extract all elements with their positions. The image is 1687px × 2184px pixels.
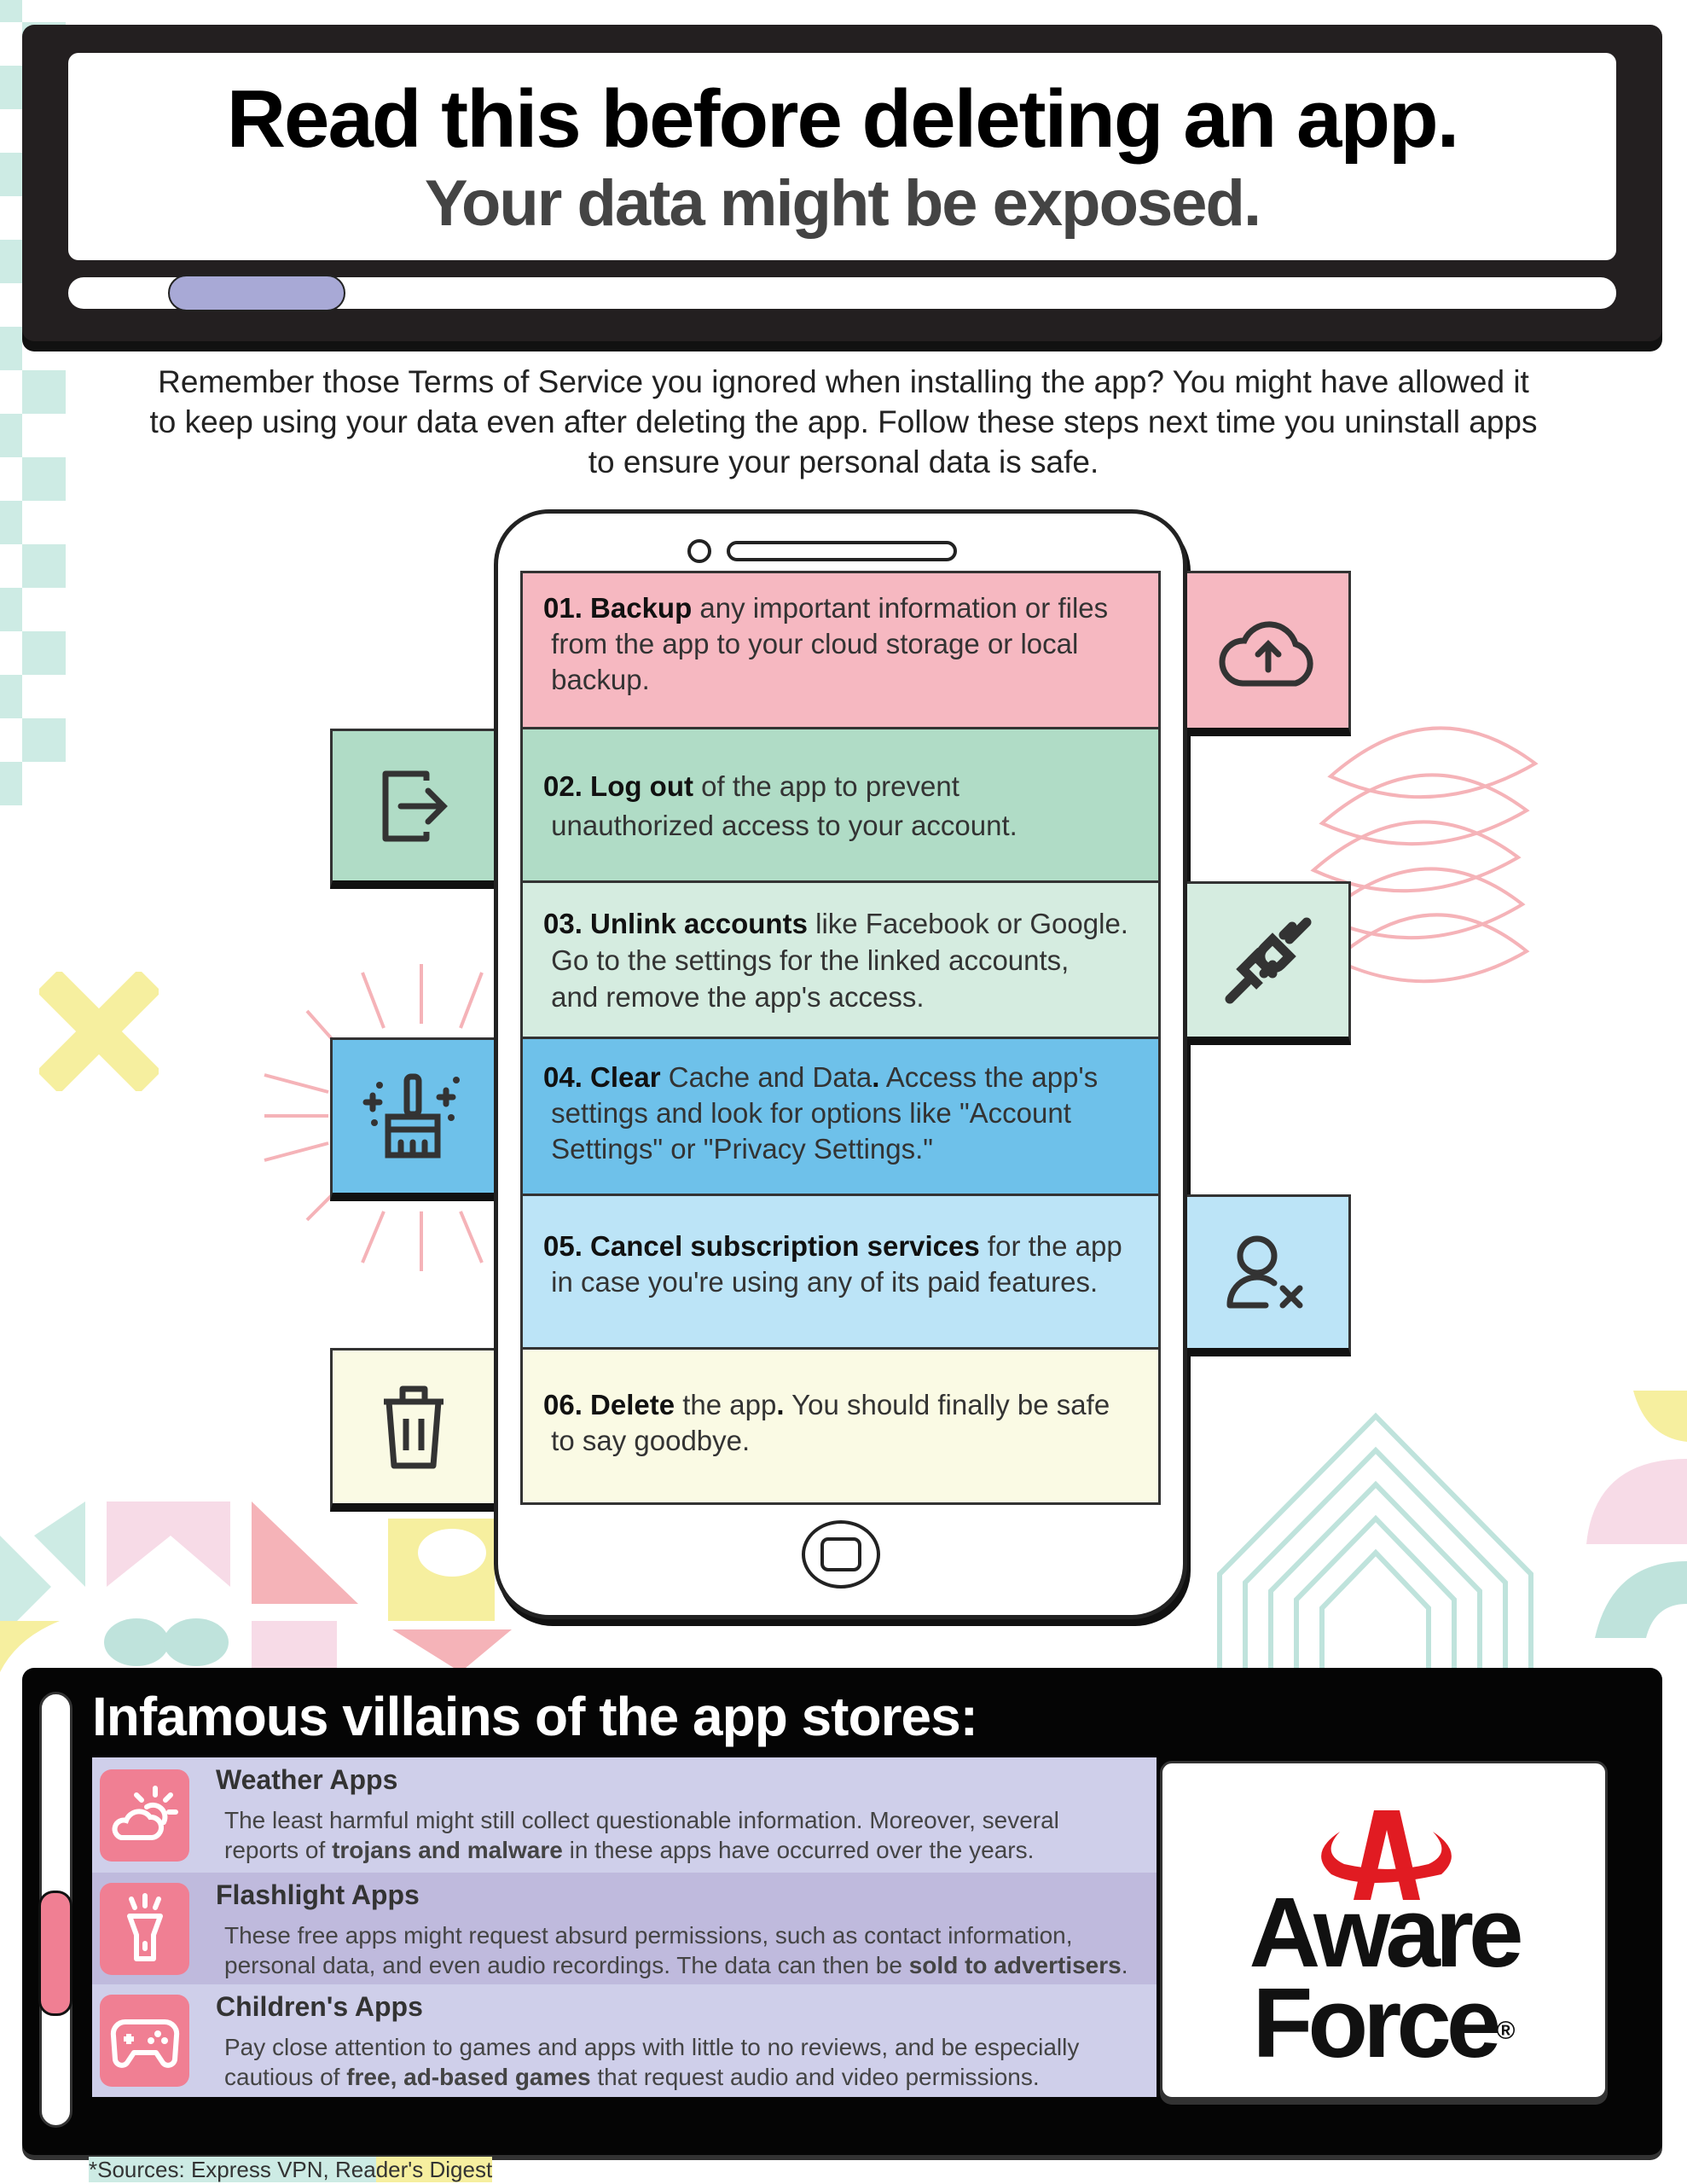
row: children's apps: Children's Apps [216, 1991, 423, 2022]
icon: flashlight [100, 1883, 189, 1975]
logo text: Force® [1252, 1967, 1515, 2078]
tab: trash icon [330, 1348, 494, 1512]
title box [68, 53, 1616, 260]
step 06 [520, 1347, 1161, 1505]
step 05: in case you're using any of its paid features. [551, 1266, 1098, 1298]
step 02: 02. Log out of the app to prevent [543, 770, 959, 802]
logo box [1160, 1761, 1608, 2100]
home button [802, 1520, 880, 1589]
speaker [687, 539, 711, 563]
decoration: yellow X [39, 972, 159, 1091]
villains panel [22, 1668, 1662, 2155]
step 06: to say goodbye. [551, 1425, 750, 1456]
decoration: bottom-left shapes [0, 1502, 512, 1672]
step 05 [520, 1194, 1161, 1350]
logo text [1249, 1877, 1521, 2078]
icon: logo emblem [1321, 1810, 1452, 1900]
icon: gamepad [100, 1995, 189, 2087]
row: weather apps: The least harmful might still collect questionable information. Moreover, several [224, 1807, 1059, 1833]
row: flashlight apps: Flashlight Apps [216, 1879, 420, 1910]
step 01: backup. [551, 664, 650, 695]
intro text: to ensure your personal data is safe. [588, 444, 1099, 479]
step 01 [520, 571, 1161, 729]
step 05: 05. Cancel subscription services for the app [543, 1230, 1122, 1262]
step 03: and remove the app's access. [551, 981, 925, 1013]
phone [494, 509, 1187, 1619]
tab: remove user icon [1187, 1194, 1351, 1356]
title: Read this before deleting an app. [227, 73, 1458, 165]
step 06: 06. Delete the app. You should finally be safe [543, 1389, 1110, 1420]
tab: unplug icon [1187, 881, 1351, 1045]
row: weather apps [92, 1757, 1157, 1873]
sources: *Sources: Express VPN, Reader's Digest [89, 2157, 492, 2182]
row: flashlight apps: These free apps might request absurd permissions, such as contact information, [224, 1922, 1073, 1949]
step 04: Settings" or "Privacy Settings." [551, 1133, 933, 1165]
tab: cloud upload icon [1187, 571, 1351, 736]
intro text: Remember those Terms of Service you ignored when installing the app? You might have allowed it [158, 364, 1529, 399]
step 01: from the app to your cloud storage or local [551, 628, 1078, 659]
step 03 [520, 880, 1161, 1039]
step 04: settings and look for options like "Account [551, 1097, 1071, 1129]
row: flashlight apps: personal data, and even audio recordings. The data can then be sold to advertisers. [224, 1952, 1128, 1978]
step 01: 01. Backup any important information or files [543, 592, 1108, 624]
row: weather apps: Weather Apps [216, 1764, 397, 1795]
step 04: 04. Clear Cache and Data. Access the app's [543, 1061, 1098, 1093]
decoration: teal nested houses [1217, 1413, 1533, 1668]
tab: logout icon [330, 729, 494, 889]
logo text: Aware [1249, 1877, 1519, 1988]
decoration: right edge shapes [1586, 1391, 1687, 1638]
step 04 [520, 1037, 1161, 1196]
scrollbar [68, 277, 1616, 309]
row: children's apps: cautious of free, ad-based games that request audio and video permissions. [224, 2064, 1040, 2090]
row: flashlight apps [92, 1873, 1157, 1984]
decoration: sunburst [264, 964, 484, 1271]
icon: weather [100, 1769, 189, 1862]
row: weather apps: reports of trojans and malware in these apps have occurred over the years. [224, 1837, 1034, 1863]
tab: broom icon [330, 1037, 494, 1201]
step 03: 03. Unlink accounts like Facebook or Google. [543, 908, 1128, 939]
decoration: checkerboard [0, 0, 66, 805]
row: children's apps: Pay close attention to games and apps with little to no reviews, and be especially [224, 2034, 1079, 2060]
subtitle: Your data might be exposed. [425, 167, 1260, 240]
header panel [22, 25, 1662, 341]
scrollbar left [39, 1692, 72, 2128]
step 03: Go to the settings for the linked accounts, [551, 944, 1069, 976]
intro text [150, 364, 1537, 479]
row: children's apps [92, 1984, 1157, 2097]
intro text: to keep using your data even after deleting the app. Follow these steps next time you uninstall apps [150, 404, 1537, 439]
villains title: Infamous villains of the app stores: [92, 1686, 977, 1747]
step 02 [520, 727, 1161, 883]
decoration: pink leaves [1310, 726, 1539, 983]
step 02: unauthorized access to your account. [551, 810, 1017, 841]
